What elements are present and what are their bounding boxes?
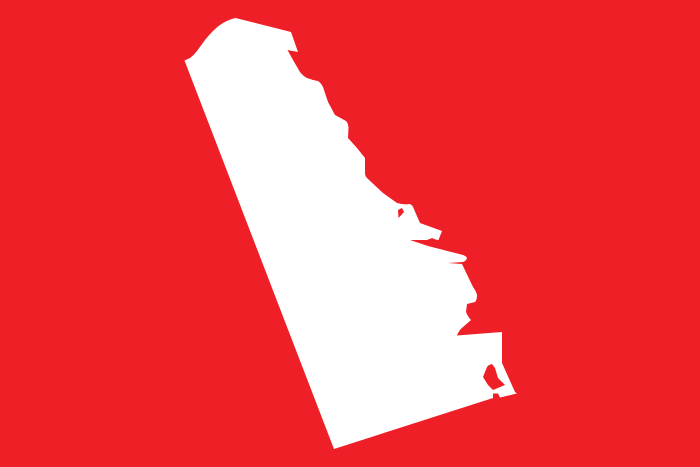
state outline: Delaware [184, 18, 517, 449]
